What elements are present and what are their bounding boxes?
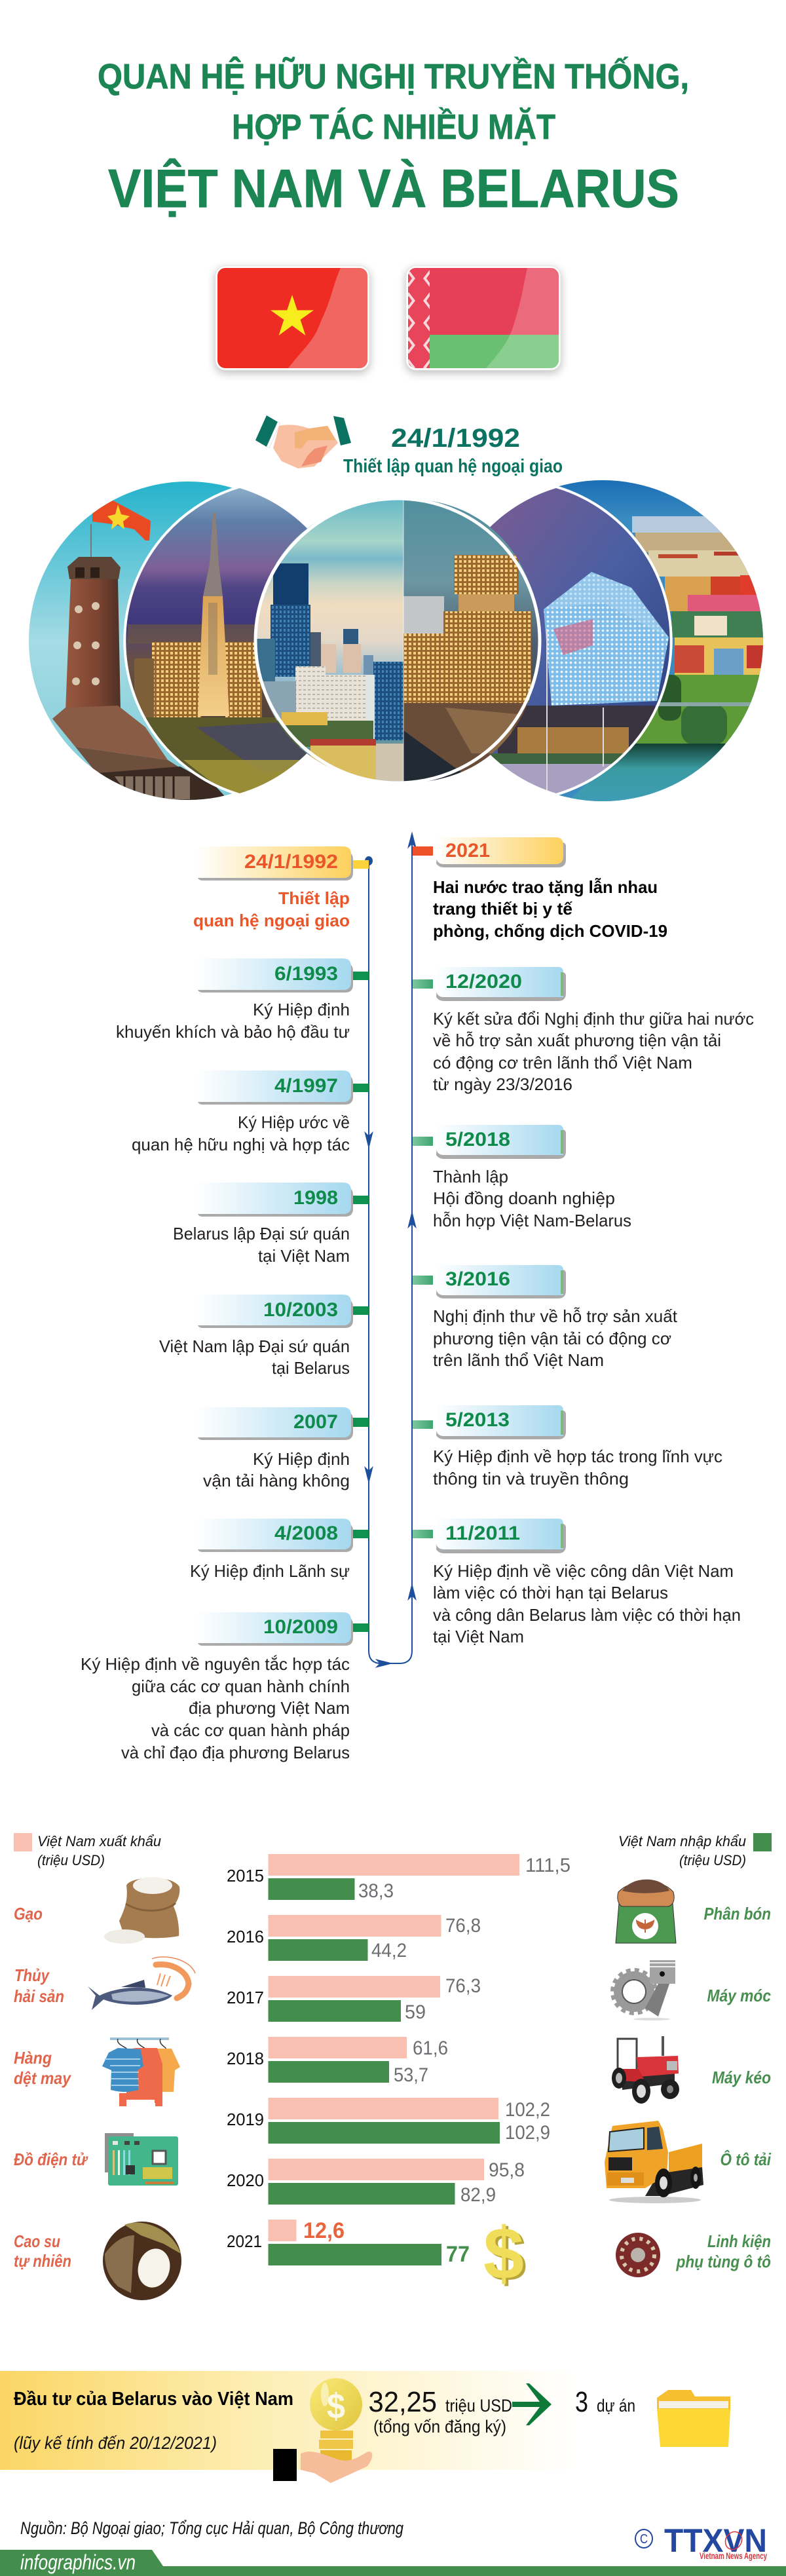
timeline entry: 3/2016: 3/2016 bbox=[445, 1268, 510, 1290]
title line 1: QUAN HỆ HỮU NGHỊ TRUYỀN THỐNG, bbox=[98, 56, 689, 96]
timeline entry: 4/1997 bbox=[132, 1070, 369, 1154]
legend: exports: (triệu USD) bbox=[37, 1852, 105, 1868]
investment heading: Đầu tư của Belarus vào Việt Nam bbox=[14, 2389, 293, 2410]
timeline entry: 6/1993: Ký Hiệp định bbox=[253, 1000, 350, 1019]
footer band bbox=[0, 2550, 786, 2576]
timeline entry: 4/2008: Ký Hiệp định Lãnh sự bbox=[190, 1561, 350, 1581]
timeline entry: 10/2003 bbox=[159, 1295, 369, 1378]
timeline entry: 5/2018: Thành lập bbox=[433, 1167, 508, 1186]
row 2020 bbox=[227, 2159, 525, 2206]
row 2017: 76,3 bbox=[445, 1975, 481, 1997]
timeline entry: 4/1997: quan hệ hữu nghị và hợp tác bbox=[132, 1135, 350, 1154]
timeline entry: 5/2018: 5/2018 bbox=[445, 1129, 510, 1150]
logo: TTXVN: C bbox=[640, 2532, 648, 2547]
icon: auto part bbox=[616, 2233, 660, 2277]
legend: imports bbox=[618, 1833, 772, 1868]
timeline entry: 12/2020 bbox=[413, 967, 754, 1094]
lens outline: second photo bbox=[124, 487, 355, 795]
timeline entry: 11/2011: và công dân Belarus làm việc có thời hạn bbox=[433, 1605, 741, 1625]
timeline entry: 6/1993: 6/1993 bbox=[274, 963, 338, 985]
row 2015: 111,5 bbox=[525, 1855, 571, 1876]
timeline entry: 1998: 1998 bbox=[293, 1187, 338, 1209]
timeline entry: 11/2011 bbox=[413, 1519, 741, 1646]
row 2017: 59 bbox=[405, 2001, 426, 2023]
timeline entry: 12/2020: có động cơ trên lãnh thổ Việt Nam bbox=[433, 1053, 692, 1072]
export category labels bbox=[14, 1904, 88, 2271]
export category labels: Đồ điện tử bbox=[14, 2150, 88, 2169]
timeline entry: 10/2009 bbox=[81, 1612, 369, 1762]
timeline entry: 10/2009: địa phương Việt Nam bbox=[189, 1698, 350, 1718]
photo: Hanoi flag tower bbox=[29, 482, 233, 800]
timeline entry: 1998 bbox=[173, 1183, 369, 1266]
import category labels bbox=[676, 1904, 772, 2271]
import category labels: phụ tùng ô tô bbox=[676, 2252, 771, 2271]
timeline entry: 4/1997: 4/1997 bbox=[274, 1075, 338, 1097]
timeline entry: 5/2018 bbox=[413, 1125, 631, 1230]
row 2018: 61,6 bbox=[413, 2037, 448, 2059]
arrow up top bbox=[409, 834, 415, 846]
timeline entry: 10/2009: giữa các cơ quan hành chính bbox=[132, 1676, 350, 1696]
timeline entry: 5/2013: Ký Hiệp định về hợp tác trong lĩnh vực bbox=[433, 1447, 722, 1466]
timeline entry: 2021: phòng, chống dịch COVID-19 bbox=[433, 921, 667, 941]
timeline entry: 3/2016: Nghị định thư về hỗ trợ sản xuất bbox=[433, 1306, 678, 1326]
row 2020: 82,9 bbox=[460, 2184, 496, 2206]
timeline entry: 2007: Ký Hiệp định bbox=[253, 1449, 350, 1469]
stat: registered capital: triệu USD bbox=[445, 2396, 512, 2415]
export category labels: Thủy bbox=[14, 1965, 50, 1985]
flag: Vietnam bbox=[215, 266, 369, 373]
timeline entry: 5/2013 bbox=[413, 1405, 722, 1488]
photo collage: landmarks of Vietnam and Belarus bbox=[29, 478, 770, 806]
row 2018: 53,7 bbox=[394, 2064, 428, 2086]
milestone date: 24/1/1992 bbox=[391, 424, 520, 453]
arrow up 2 bbox=[409, 1213, 415, 1226]
flag: Belarus bbox=[406, 266, 561, 373]
photo: Ho Chi Minh City skyline bbox=[126, 488, 307, 793]
icon: fish and shrimp bbox=[88, 1957, 195, 2010]
title line 2: HỢP TÁC NHIỀU MẶT bbox=[232, 107, 555, 147]
legend: exports: Việt Nam xuất khẩu bbox=[37, 1833, 161, 1849]
timeline entry: 24/1/1992: Thiết lập bbox=[278, 888, 350, 908]
timeline entry: 12/2020: Ký kết sửa đổi Nghị định thư giữa hai nước bbox=[433, 1009, 754, 1029]
row 2015: 2015 bbox=[227, 1866, 264, 1885]
timeline entry: 4/2008: 4/2008 bbox=[274, 1523, 338, 1544]
icon: fertilizer bag bbox=[616, 1880, 676, 1943]
icon: clothes on a rail bbox=[102, 2037, 180, 2106]
bar chart: trade by year bbox=[227, 1854, 571, 2267]
icon: rice sack bbox=[104, 1877, 179, 1944]
row 2015 bbox=[227, 1854, 571, 1902]
export category labels: Gạo bbox=[14, 1904, 43, 1923]
timeline entry: 24/1/1992 bbox=[193, 846, 369, 930]
footer site name: infographics.vn bbox=[20, 2550, 136, 2574]
row 2021: 12,6 bbox=[303, 2218, 345, 2243]
timeline entry: 11/2011: 11/2011 bbox=[445, 1523, 520, 1544]
row 2017: 2017 bbox=[227, 1988, 264, 2007]
timeline entry: 24/1/1992: quan hệ ngoại giao bbox=[193, 911, 350, 930]
milestone caption: Thiết lập quan hệ ngoại giao bbox=[343, 456, 563, 477]
row 2019: 102,2 bbox=[505, 2099, 550, 2121]
export category labels: tự nhiên bbox=[14, 2251, 71, 2271]
row 2018 bbox=[227, 2037, 448, 2086]
photo: Hanoi skyline bbox=[252, 495, 406, 786]
lens outline: central photo bbox=[255, 499, 540, 783]
row 2016 bbox=[227, 1915, 481, 1961]
timeline entry: 10/2009: và các cơ quan hành pháp bbox=[151, 1720, 350, 1740]
timeline entry: 10/2009: Ký Hiệp định về nguyên tắc hợp tác bbox=[81, 1654, 350, 1674]
timeline entry: 5/2013: thông tin và truyền thông bbox=[433, 1469, 629, 1488]
arrow down 2 bbox=[365, 1468, 372, 1481]
timeline entry: 6/1993: khuyến khích và bảo hộ đầu tư bbox=[116, 1022, 350, 1042]
timeline entry: 12/2020: từ ngày 23/3/2016 bbox=[433, 1074, 572, 1094]
timeline entry: 3/2016: trên lãnh thổ Việt Nam bbox=[433, 1350, 604, 1370]
row 2020: 2020 bbox=[227, 2170, 264, 2190]
icon: folder bbox=[657, 2390, 730, 2447]
legend: exports bbox=[14, 1833, 161, 1868]
import category labels: Linh kiện bbox=[707, 2231, 771, 2251]
export category labels: Cao su bbox=[14, 2231, 60, 2251]
photo: Minsk station square bbox=[403, 495, 542, 786]
title bbox=[98, 56, 689, 219]
stat: projects: 3 bbox=[575, 2386, 588, 2418]
timeline entry: 10/2009: 10/2009 bbox=[263, 1616, 338, 1638]
stat: projects bbox=[575, 2386, 635, 2418]
arrow down 1 bbox=[365, 1133, 372, 1146]
icon: circuit board bbox=[105, 2133, 178, 2186]
investment band bbox=[0, 2371, 576, 2470]
row 2021: 2021 bbox=[227, 2231, 262, 2251]
arrow up 1 bbox=[409, 1585, 415, 1599]
timeline entry: 11/2011: làm việc có thời hạn tại Belarus bbox=[433, 1583, 668, 1602]
row 2019: 2019 bbox=[227, 2110, 264, 2129]
timeline entry: 10/2003: tại Belarus bbox=[272, 1358, 350, 1378]
icon: dollar sign: $ bbox=[483, 2212, 524, 2294]
timeline entry: 10/2003: Việt Nam lập Đại sứ quán bbox=[159, 1336, 350, 1356]
icon: gear and piston bbox=[612, 1960, 675, 2020]
timeline entry: 10/2009: và chỉ đạo địa phương Belarus bbox=[121, 1743, 350, 1762]
timeline entry: 2021 bbox=[413, 837, 667, 941]
icon: handshake bbox=[255, 415, 351, 468]
timeline entry: 2021: trang thiết bị y tế bbox=[433, 899, 573, 919]
timeline entry: 12/2020: 12/2020 bbox=[445, 971, 522, 993]
title line 3: VIỆT NAM VÀ BELARUS bbox=[108, 158, 679, 219]
export category labels: dệt may bbox=[14, 2068, 71, 2088]
row 2017 bbox=[227, 1975, 481, 2023]
icon: tractor bbox=[612, 2036, 679, 2104]
lens outline: fourth photo bbox=[441, 487, 671, 795]
icon: hand holding coin bbox=[273, 2378, 372, 2483]
photo: Belarus old town bbox=[557, 478, 770, 806]
timeline entry: 2021: 2021 bbox=[445, 840, 490, 862]
timeline entry: 6/1993 bbox=[116, 958, 369, 1042]
arrow right bbox=[377, 1660, 390, 1667]
row 2019: 102,9 bbox=[505, 2122, 550, 2144]
icon: dollar sign: $ bbox=[486, 2214, 527, 2296]
icon: natural rubber bbox=[103, 2222, 181, 2300]
timeline entry: 2021: Hai nước trao tặng lẫn nhau bbox=[433, 877, 658, 897]
timeline entry: 24/1/1992: 24/1/1992 bbox=[244, 851, 338, 873]
arrow: capital to projects bbox=[512, 2383, 552, 2425]
investment note: (lũy kế tính đến 20/12/2021) bbox=[14, 2433, 217, 2453]
import category labels: Phân bón bbox=[703, 1904, 771, 1923]
photo: National Library of Belarus bbox=[490, 488, 670, 793]
stat: registered capital: (tổng vốn đăng ký) bbox=[373, 2417, 506, 2436]
icon: hand holding coin: $ bbox=[327, 2387, 345, 2426]
stat: projects: dự án bbox=[597, 2396, 635, 2415]
row 2021 bbox=[227, 2218, 470, 2267]
timeline start dot bbox=[365, 857, 372, 865]
timeline entry: 4/2008 bbox=[190, 1519, 369, 1581]
export category labels: hải sản bbox=[14, 1986, 64, 2006]
row 2018: 2018 bbox=[227, 2049, 264, 2068]
row 2021: 77 bbox=[446, 2242, 470, 2267]
timeline spine bbox=[365, 834, 415, 1667]
export category labels: Hàng bbox=[14, 2048, 52, 2068]
legend: imports: (triệu USD) bbox=[679, 1852, 746, 1868]
legend: imports: Việt Nam nhập khẩu bbox=[618, 1833, 746, 1849]
timeline entry: 5/2013: 5/2013 bbox=[445, 1409, 510, 1431]
timeline entry: 3/2016: phương tiện vận tải có động cơ bbox=[433, 1329, 671, 1348]
timeline entry: 4/1997: Ký Hiệp ước về bbox=[238, 1112, 350, 1132]
row 2020: 95,8 bbox=[489, 2159, 525, 2181]
row 2016: 2016 bbox=[227, 1927, 264, 1946]
import category labels: Máy kéo bbox=[712, 2068, 771, 2087]
stat: registered capital bbox=[368, 2386, 512, 2436]
timeline entry: 3/2016 bbox=[413, 1265, 678, 1370]
source: Nguồn: Bộ Ngoại giao; Tổng cục Hải quan, Bộ Công thương bbox=[20, 2518, 403, 2538]
timeline entry: 11/2011: tại Việt Nam bbox=[433, 1627, 524, 1646]
timeline entry: 11/2011: Ký Hiệp định về việc công dân Việt Nam bbox=[433, 1561, 734, 1581]
timeline entry: 1998: tại Việt Nam bbox=[258, 1246, 350, 1266]
timeline entry: 1998: Belarus lập Đại sứ quán bbox=[173, 1224, 350, 1243]
icon: dump truck bbox=[605, 2121, 703, 2203]
import category labels: Máy móc bbox=[707, 1986, 771, 2005]
row 2019 bbox=[227, 2098, 550, 2144]
row 2015: 38,3 bbox=[358, 1880, 394, 1902]
stat: registered capital: 32,25 bbox=[368, 2386, 437, 2418]
row 2016: 44,2 bbox=[371, 1940, 407, 1961]
row 2016: 76,8 bbox=[445, 1915, 481, 1937]
timeline entry: 12/2020: về hỗ trợ sản xuất phương tiện vận tải bbox=[433, 1031, 721, 1050]
logo: TTXVN: TTXVN bbox=[664, 2522, 767, 2559]
timeline entry: 2007: vận tải hàng không bbox=[203, 1471, 350, 1490]
timeline entry: 2007 bbox=[197, 1407, 369, 1490]
timeline entry: 5/2018: hỗn hợp Việt Nam-Belarus bbox=[433, 1211, 631, 1230]
timeline entry: 10/2003: 10/2003 bbox=[263, 1299, 338, 1321]
timeline entry: 5/2018: Hội đồng doanh nghiệp bbox=[433, 1188, 615, 1208]
import category labels: Ô tô tải bbox=[720, 2150, 772, 2169]
timeline entry: 2007: 2007 bbox=[293, 1411, 338, 1433]
